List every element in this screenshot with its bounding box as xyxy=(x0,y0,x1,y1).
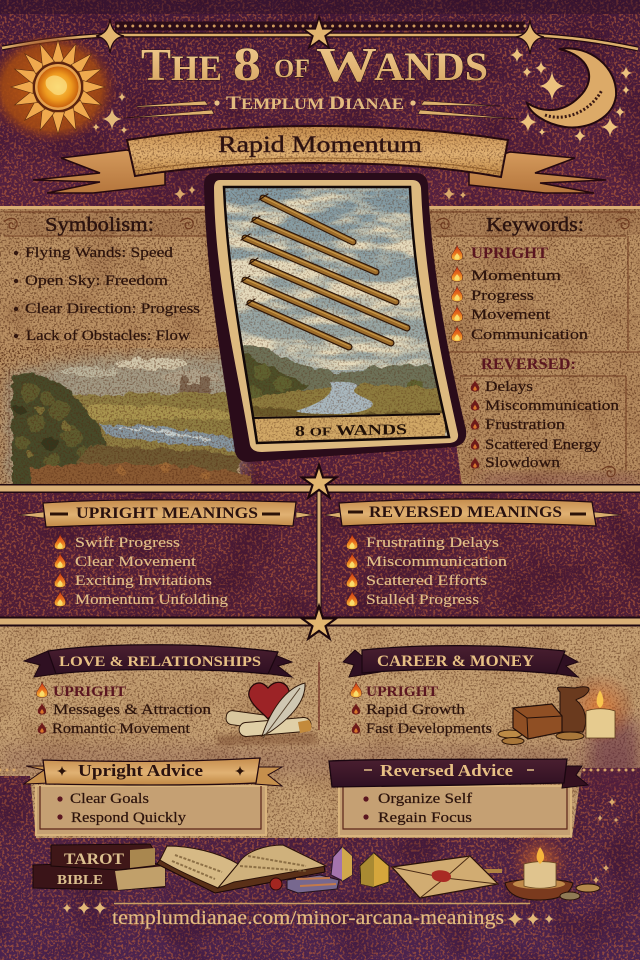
list: upright advice xyxy=(57,791,187,826)
advice: upright xyxy=(24,758,282,835)
decorative stars near sun xyxy=(92,92,128,134)
illustration: candle in bowl xyxy=(505,832,600,900)
subtitle with flanking lines xyxy=(124,93,518,119)
list: symbolism items: Lack of Obstacles: Flow xyxy=(26,328,191,344)
title: T xyxy=(141,39,171,90)
illustration: tarot and bible books xyxy=(33,844,165,890)
banner: love and relationships xyxy=(24,645,292,677)
panel: career and money xyxy=(343,646,636,744)
list: career: UPRIGHT xyxy=(366,684,438,700)
decorative dots and stars at bottom right xyxy=(0,770,640,884)
banner: love and relationships: LOVE & RELATIONSHIPS xyxy=(59,654,261,670)
panel: love and relationships xyxy=(24,645,319,745)
advice: reversed xyxy=(329,759,588,836)
banner: reversed advice: Reversed Advice xyxy=(380,761,513,780)
banner: career and money: CAREER & MONEY xyxy=(377,653,534,670)
list: love: UPRIGHT xyxy=(53,684,126,700)
heading: Keywords: Keywords: xyxy=(486,214,584,236)
title xyxy=(141,37,488,92)
list: reversed meanings: Miscommunication xyxy=(366,554,508,570)
card gold border xyxy=(214,180,458,452)
list: symbolism items: Clear Direction: Progress xyxy=(25,301,200,317)
illustration: landscape with castle xyxy=(0,345,262,490)
card wands xyxy=(241,194,407,347)
illustration: open book xyxy=(157,845,326,893)
illustration: sealed envelope xyxy=(392,856,502,898)
title: W xyxy=(316,37,377,92)
list: upright advice: Clear Goals xyxy=(70,791,149,807)
top border ornament xyxy=(2,17,638,54)
box: reversed advice xyxy=(339,786,571,836)
panel backgrounds: parchment xyxy=(0,207,640,838)
icon: chest, pouch and candle xyxy=(498,672,636,744)
subtitle with flanking lines: T xyxy=(226,93,241,114)
footer: url and stars xyxy=(62,901,554,929)
list: upright keywords: Progress xyxy=(471,288,534,304)
footer: url and stars: templumdianae.com/minor-arcana-meanings xyxy=(112,907,504,929)
list: upright keywords: Movement xyxy=(471,307,550,323)
title: ANDS xyxy=(374,44,488,89)
heading: Symbolism: Symbolism: xyxy=(45,214,154,236)
illustration: crystals, stone and seal xyxy=(270,847,389,893)
divider: love and career xyxy=(318,662,320,730)
banner: reversed meanings xyxy=(324,499,622,526)
list: symbolism items xyxy=(14,245,200,344)
banner: reversed meanings: REVERSED MEANINGS xyxy=(369,504,562,521)
small stars beside card xyxy=(174,185,467,201)
list: reversed meanings: Stalled Progress xyxy=(366,592,479,608)
list: reversed keywords: Slowdown xyxy=(485,455,561,471)
illustration: tarot and bible books: TAROT xyxy=(64,851,125,868)
list: upright keywords: Momentum xyxy=(471,268,562,284)
list: reversed advice: Regain Focus xyxy=(378,810,472,826)
list: reversed keywords: Miscommunication xyxy=(485,398,620,414)
ribbon: Rapid Momentum: Rapid Momentum xyxy=(218,132,422,157)
list: love xyxy=(36,682,212,737)
card title: 8 OF WANDS xyxy=(295,422,407,440)
box inner line xyxy=(40,786,261,829)
list: upright keywords xyxy=(451,245,589,343)
list: upright keywords: Communication xyxy=(471,327,589,343)
list: upright meanings: Swift Progress xyxy=(75,535,180,551)
ribbon: Rapid Momentum xyxy=(33,126,606,193)
panel: reversed meanings xyxy=(324,499,622,608)
list: reversed keywords: Delays xyxy=(485,379,533,395)
tarot card: 8 of wands xyxy=(204,173,466,462)
panel: keywords xyxy=(451,214,620,471)
list: reversed meanings: Scattered Efforts xyxy=(366,573,487,589)
banner: reversed advice xyxy=(329,759,588,788)
list: upright meanings: Momentum Unfolding xyxy=(75,592,229,608)
banner: career and money xyxy=(343,646,578,677)
icon: sun xyxy=(0,32,118,144)
section dividers xyxy=(0,465,640,639)
banner: upright meanings: UPRIGHT MEANINGS xyxy=(76,505,258,522)
icon: crescent moon and stars xyxy=(510,47,632,143)
list: upright meanings: Exciting Invitations xyxy=(75,573,212,589)
list: reversed keywords: Scattered Energy xyxy=(485,437,602,453)
list: career xyxy=(350,682,492,737)
list: symbolism items: Flying Wands: Speed xyxy=(25,245,174,261)
list: upright meanings: Clear Movement xyxy=(75,554,197,570)
box inner line xyxy=(343,786,567,829)
list: reversed advice xyxy=(363,791,472,826)
list: love: Messages & Attraction xyxy=(53,702,212,718)
list: reversed meanings: Frustrating Delays xyxy=(366,535,499,551)
list: upright advice: Respond Quickly xyxy=(71,810,187,826)
list: reversed keywords xyxy=(471,379,620,471)
illustration: tarot and bible books: BIBLE xyxy=(57,873,103,888)
title: OF xyxy=(274,54,310,83)
panel lines and corner flourishes xyxy=(0,208,640,478)
title: 8 xyxy=(233,38,261,91)
list: upright meanings xyxy=(54,534,229,608)
list: symbolism items: Open Sky: Freedom xyxy=(25,273,169,289)
card frame xyxy=(204,173,466,462)
list: reversed advice: Organize Self xyxy=(378,791,472,807)
card inner line xyxy=(224,187,449,443)
icon: heart, quill and scrolls xyxy=(215,682,318,745)
list: upright keywords: UPRIGHT xyxy=(471,245,549,262)
subtitle with flanking lines: EMPLUM DIANAE xyxy=(241,93,395,114)
banner: upright meanings xyxy=(18,500,314,527)
list: career: Fast Developments xyxy=(366,721,492,737)
list: reversed keywords: Frustration xyxy=(485,417,566,433)
panel: symbolism xyxy=(14,214,200,344)
list: career: Rapid Growth xyxy=(366,702,466,718)
panel: upright meanings xyxy=(18,500,314,608)
box: upright advice xyxy=(36,786,266,835)
title: HE xyxy=(171,48,222,88)
list: reversed meanings xyxy=(346,534,508,608)
heading: Reversed: REVERSED: xyxy=(481,356,576,373)
card scene xyxy=(220,185,455,445)
banner: upright advice: Upright Advice xyxy=(78,761,203,780)
banner: upright advice xyxy=(24,758,282,786)
list: love: Romantic Movement xyxy=(52,721,190,737)
